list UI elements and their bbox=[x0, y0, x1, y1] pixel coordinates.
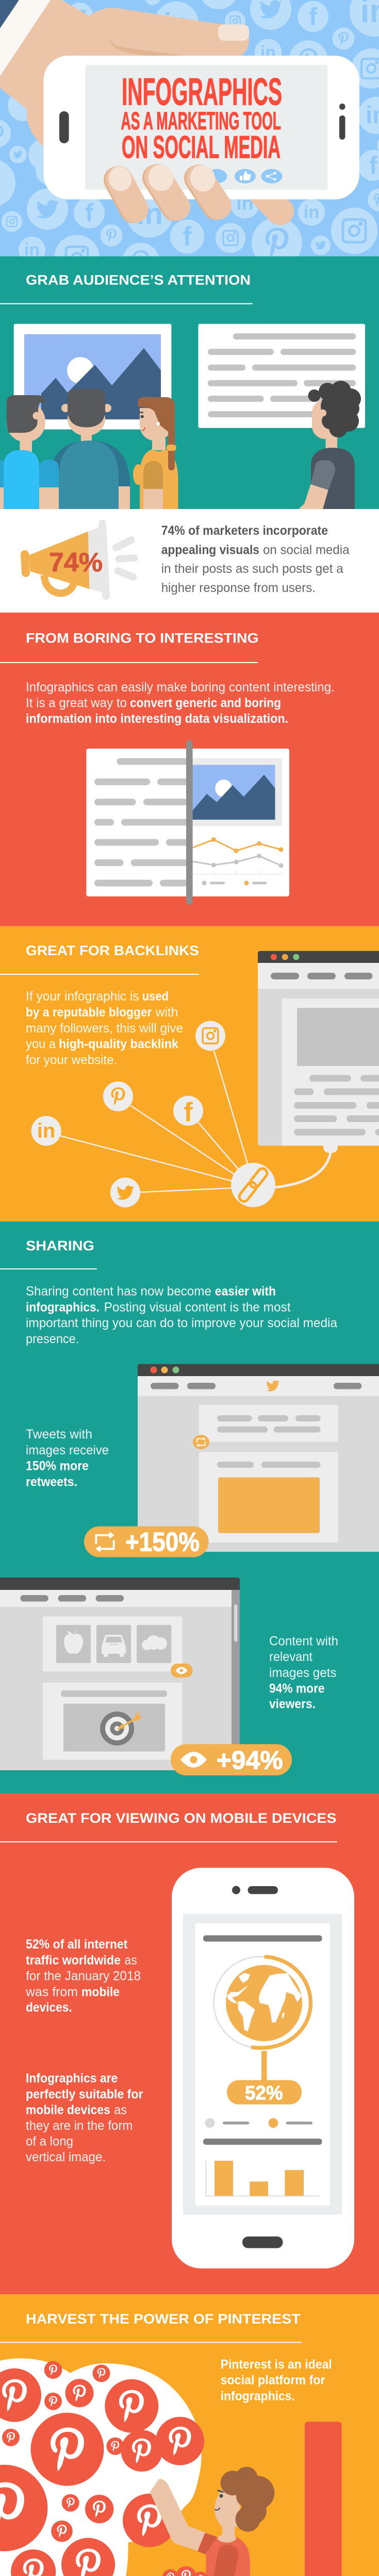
icon: linkedin bbox=[31, 1116, 61, 1146]
pinky finger bbox=[260, 191, 280, 211]
content text: relevant bbox=[269, 1650, 312, 1664]
background social icons: in bbox=[260, 43, 276, 62]
phone illustration bbox=[172, 1868, 354, 2268]
background social icons bbox=[0, 0, 379, 280]
content text: 94% more bbox=[269, 1681, 325, 1696]
icon: chain link bbox=[231, 1163, 275, 1207]
body text: convert generic and boring bbox=[130, 696, 281, 710]
body text: It is a great way to bbox=[26, 696, 127, 710]
panel: sharing bbox=[0, 1222, 379, 1793]
icon: instagram bbox=[195, 1021, 225, 1051]
icon: megaphone: 74% bbox=[49, 548, 103, 578]
body text: Infographics can easily make boring content interesting. bbox=[26, 680, 335, 694]
person: woman with braid bbox=[133, 397, 178, 509]
body text: Posting visual content is the most bbox=[104, 1300, 291, 1314]
person: woman with curly hair bbox=[299, 381, 361, 509]
content text: viewers. bbox=[269, 1697, 316, 1711]
suitability text bbox=[26, 2071, 143, 2164]
body text: easier with bbox=[215, 1284, 276, 1299]
background social icons: f bbox=[85, 200, 94, 227]
suitability text: mobile devices bbox=[26, 2103, 110, 2117]
divider bar bbox=[186, 740, 193, 905]
icon: facebook: f bbox=[184, 1097, 193, 1127]
line chart bbox=[193, 837, 284, 885]
body text: for your website. bbox=[26, 1053, 117, 1067]
heading: SHARING bbox=[26, 1238, 94, 1253]
background social icons: in bbox=[163, 7, 189, 39]
background social icons: f bbox=[309, 3, 318, 31]
callout: +94% bbox=[171, 1744, 292, 1775]
fingers bbox=[106, 162, 218, 210]
background social icons: f bbox=[369, 152, 378, 179]
stat text: higher response from users. bbox=[161, 581, 316, 595]
heading: GREAT FOR BACKLINKS bbox=[26, 943, 199, 958]
mobile traffic text: was from bbox=[25, 1985, 78, 1999]
icon: cloud bbox=[142, 1635, 167, 1650]
mobile traffic text: traffic worldwide bbox=[26, 1953, 121, 1968]
globe chart: 52% bbox=[245, 2082, 283, 2104]
stat text: appealing visuals bbox=[161, 543, 259, 557]
icon: facebook bbox=[173, 1096, 203, 1127]
background social icons: in bbox=[136, 197, 163, 231]
person on stool bbox=[139, 2467, 274, 2576]
boring text lines bbox=[94, 758, 189, 886]
tweets text: retweets. bbox=[26, 1475, 77, 1489]
interesting image bbox=[192, 758, 282, 826]
icon: megaphone bbox=[21, 523, 135, 596]
body text: used bbox=[142, 989, 169, 1004]
head bbox=[215, 2489, 240, 2527]
body text: high-quality backlink bbox=[59, 1037, 178, 1052]
icon: small retweet bbox=[193, 1435, 209, 1449]
icon: apple bbox=[64, 1630, 83, 1654]
pinterest tree bbox=[0, 2358, 204, 2576]
like and share icons bbox=[206, 169, 283, 183]
suitability text: Infographics are bbox=[26, 2071, 118, 2086]
body text: presence. bbox=[26, 1332, 79, 1346]
before and after document bbox=[86, 740, 289, 905]
body text: with bbox=[155, 1005, 178, 1020]
bar chart bbox=[206, 2161, 319, 2196]
background social icons: in bbox=[236, 193, 254, 214]
heading: GREAT FOR VIEWING ON MOBILE DEVICES bbox=[26, 1810, 337, 1826]
body text: Sharing content has now become bbox=[26, 1284, 211, 1299]
twitter browser window bbox=[138, 1364, 379, 1552]
icon: car bbox=[102, 1635, 126, 1657]
suitability text: vertical image. bbox=[26, 2150, 106, 2164]
title bbox=[121, 77, 282, 159]
content text bbox=[269, 1634, 338, 1711]
suitability text: they are in the form bbox=[26, 2119, 133, 2133]
panel: 74% statistic bbox=[0, 509, 379, 613]
pinterest text bbox=[221, 2358, 332, 2403]
panel: grab audience's attention bbox=[0, 257, 379, 509]
legend bbox=[205, 2118, 312, 2128]
body text: by a reputable blogger bbox=[26, 1005, 152, 1020]
icon: target with arrow bbox=[100, 1710, 143, 1745]
stat text: on social media bbox=[263, 543, 350, 557]
picture frame bbox=[14, 324, 171, 430]
content text: Content with bbox=[269, 1634, 338, 1649]
globe chart bbox=[213, 1957, 310, 2105]
body text: infographics. bbox=[26, 1300, 100, 1314]
callout: +150% bbox=[84, 1526, 209, 1557]
browser window bbox=[258, 951, 379, 1146]
heading: FROM BORING TO INTERESTING bbox=[26, 631, 259, 646]
body text: many followers, this will give bbox=[26, 1021, 183, 1036]
content text: images gets bbox=[269, 1666, 337, 1680]
tweets text: 150% more bbox=[26, 1459, 89, 1473]
background social icons: f bbox=[183, 222, 192, 252]
body text bbox=[26, 1284, 337, 1346]
body text bbox=[26, 680, 335, 726]
body text bbox=[26, 989, 183, 1067]
pinterest text: Pinterest is an ideal bbox=[221, 2358, 332, 2372]
browser window with images bbox=[0, 1578, 240, 1770]
mobile traffic text: 52% of all internet bbox=[26, 1937, 128, 1952]
background social icons: in bbox=[304, 202, 319, 222]
mobile traffic text bbox=[25, 1937, 141, 2014]
body text: information into interesting data visualization. bbox=[26, 711, 288, 726]
body text: you a bbox=[26, 1037, 56, 1052]
stat text: 74% of marketers incorporate bbox=[161, 523, 328, 538]
icon: pinterest bbox=[103, 1081, 133, 1111]
suitability text: of a long bbox=[26, 2134, 73, 2149]
hand and thumb bbox=[0, 0, 249, 146]
sleeve and cuff bbox=[0, 0, 51, 76]
icon: twitter bbox=[110, 1178, 140, 1208]
hero illustration bbox=[0, 0, 379, 280]
mobile traffic text: devices. bbox=[26, 2000, 72, 2014]
stat text bbox=[161, 523, 350, 595]
pinterest text: infographics. bbox=[221, 2389, 295, 2403]
red pinterest bar bbox=[305, 2421, 341, 2576]
background social icons: in bbox=[24, 240, 40, 260]
mobile traffic text: for the January 2018 bbox=[26, 1969, 141, 1984]
icon: eye badge bbox=[171, 1664, 193, 1677]
panel: from boring to interesting bbox=[0, 613, 379, 926]
network of social links bbox=[31, 1021, 338, 1208]
callout: +150%: +150% bbox=[125, 1527, 200, 1557]
mobile traffic text: as bbox=[124, 1953, 137, 1968]
basket with pins bbox=[162, 2566, 213, 2576]
mobile traffic text: mobile bbox=[81, 1985, 120, 1999]
panel: great for backlinks bbox=[0, 926, 379, 1222]
heading: HARVEST THE POWER OF PINTEREST bbox=[26, 2311, 301, 2327]
person: man in teal shirt bbox=[48, 389, 130, 509]
torso and arms bbox=[150, 2479, 210, 2552]
heading: GRAB AUDIENCE’S ATTENTION bbox=[26, 272, 251, 287]
stat text: in their posts as such posts get a bbox=[161, 562, 343, 576]
text card bbox=[198, 324, 365, 428]
suitability text: perfectly suitable for bbox=[26, 2087, 143, 2102]
panel: harvest the power of pinterest bbox=[0, 2294, 379, 2576]
pinterest text: social platform for bbox=[221, 2373, 325, 2387]
panel: great for viewing on mobile devices bbox=[0, 1793, 379, 2294]
tweets text: Tweets with bbox=[26, 1427, 92, 1442]
phone bbox=[43, 56, 359, 199]
suitability text: as bbox=[114, 2103, 127, 2117]
tweets text bbox=[26, 1427, 109, 1489]
person: man in blue shirt bbox=[0, 395, 59, 509]
body text: If your infographic is bbox=[26, 989, 139, 1004]
tweets text: images receive bbox=[26, 1443, 109, 1458]
body text: important thing you can do to improve your social media bbox=[26, 1316, 337, 1330]
thumb nail bbox=[218, 25, 249, 41]
callout: +94%: +94% bbox=[217, 1746, 283, 1775]
icon: linkedin: in bbox=[37, 1120, 55, 1142]
